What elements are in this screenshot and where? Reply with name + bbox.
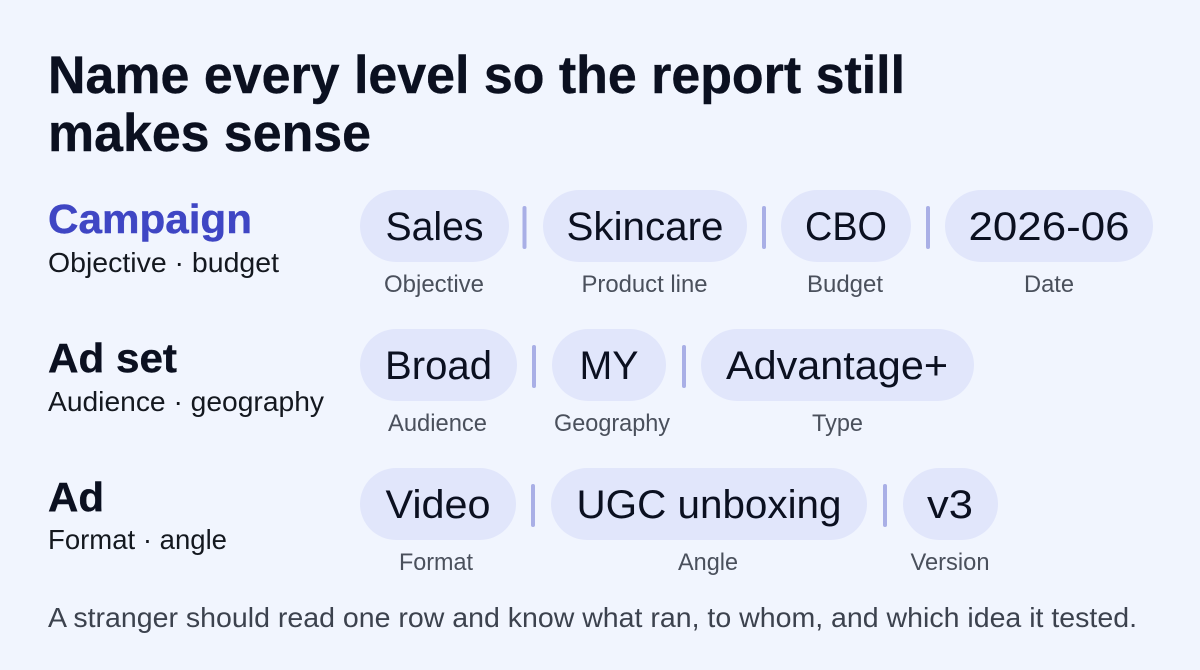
row heading: ad: Format · angle: [48, 524, 227, 555]
token: Video: Format: [399, 549, 473, 576]
token: Sales: [360, 190, 509, 298]
row: ad set: [48, 329, 974, 437]
title: makes sense: [48, 104, 371, 163]
token: MY: MY: [580, 344, 638, 388]
row: campaign: [48, 190, 1153, 298]
token: Video: Video: [386, 483, 490, 527]
token: Advantage+: [701, 329, 974, 437]
token: Advantage+: Type: [812, 410, 863, 437]
row heading: campaign: Campaign: [48, 196, 252, 242]
token: v3: Version: [910, 549, 990, 576]
token: Broad: [360, 329, 517, 437]
row: ad: [48, 468, 998, 576]
token: CBO: [781, 190, 911, 298]
row heading: ad set: Ad set: [48, 335, 177, 381]
token: 2026-06: Date: [1024, 271, 1074, 298]
row heading: campaign: [48, 196, 279, 278]
token: v3: [903, 468, 998, 576]
token: CBO: Budget: [807, 271, 883, 298]
token: v3: v3: [927, 483, 973, 527]
footer note: A stranger should read one row and know what ran, to whom, and which idea it tested.: [48, 602, 1137, 633]
title: [48, 46, 905, 163]
title: Name every level so the report still: [48, 46, 905, 105]
row heading: ad set: Audience · geography: [48, 386, 324, 417]
row heading: ad: Ad: [48, 474, 104, 520]
token: MY: Geography: [554, 410, 670, 437]
row heading: ad: [48, 474, 227, 555]
token: 2026-06: 2026-06: [968, 205, 1130, 249]
token: 2026-06: [945, 190, 1153, 298]
token: Sales: Objective: [384, 271, 484, 298]
row heading: ad set: [48, 335, 324, 417]
token: Broad: Audience: [388, 410, 487, 437]
token: Video: [360, 468, 516, 576]
token: Broad: Broad: [385, 344, 492, 388]
token: UGC unboxing: [551, 468, 867, 576]
token: UGC unboxing: UGC unboxing: [576, 483, 842, 527]
token: Skincare: Skincare: [566, 205, 724, 249]
token: MY: [552, 329, 670, 437]
token: CBO: CBO: [805, 205, 887, 249]
token: Advantage+: Advantage+: [726, 344, 948, 388]
token: Skincare: Product line: [582, 271, 708, 298]
token: UGC unboxing: Angle: [678, 549, 738, 576]
token: Skincare: [543, 190, 747, 298]
row heading: campaign: Objective · budget: [48, 247, 279, 278]
token: Sales: Sales: [386, 205, 484, 249]
